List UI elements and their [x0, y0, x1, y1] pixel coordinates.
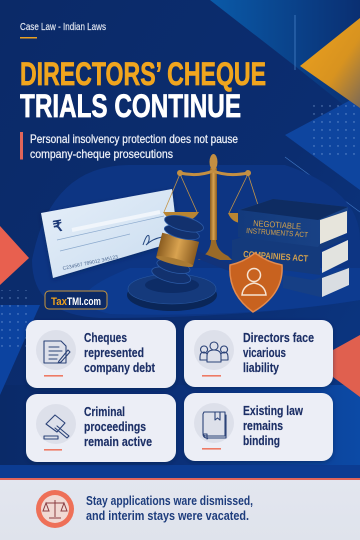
eyebrow label: [20, 21, 106, 38]
icon: people group: [194, 330, 234, 377]
card: criminal proceedings remain active: [26, 394, 176, 462]
card: directors face vicarious liability: Directors face: [243, 330, 314, 345]
card: directors face vicarious liability: liability: [243, 360, 280, 375]
footer text: [86, 493, 253, 523]
card: cheques represented company debt: represented: [84, 345, 144, 360]
logo: TaxTMI.com: Tax: [51, 296, 68, 308]
subtitle: company-cheque prosecutions: [30, 147, 173, 161]
subtitle: [20, 132, 238, 161]
footer band: [0, 478, 360, 540]
icon: stacked law books: NEGOTIABLE: [253, 218, 302, 231]
card: criminal proceedings remain active: proceedings: [84, 419, 146, 434]
icon: scales of justice: [163, 154, 258, 260]
coral accent right: [333, 335, 360, 397]
icon: stacked law books: [232, 199, 350, 297]
card: cheques represented company debt: company debt: [84, 360, 156, 375]
card: cheques represented company debt: [26, 320, 176, 388]
title: [20, 56, 266, 124]
illustration: legal scene: [32, 154, 360, 318]
icon: document with pen: [36, 330, 76, 377]
card: existing law remains binding: [184, 393, 333, 461]
card: directors face vicarious liability: vicarious: [243, 345, 286, 360]
footer text: Stay applications ware dismissed,: [86, 493, 253, 508]
title: DIRECTORS’ CHEQUE: [20, 56, 266, 92]
icon: cheque: [41, 189, 178, 278]
icon: book with bookmark: [194, 403, 234, 450]
card: criminal proceedings remain active: remain active: [84, 434, 152, 449]
icon: gavel: [127, 212, 236, 311]
subtitle: Personal insolvency protection does not pause: [30, 132, 238, 146]
logo: TaxTMI.com: TMI.com: [67, 296, 101, 308]
card: cheques represented company debt: Cheques: [84, 330, 127, 345]
eyebrow label: Case Law - Indian Laws: [20, 21, 106, 33]
orange triangle accent: [300, 18, 360, 108]
icon: stacked law books: INSTRUMENTS ACT: [246, 226, 309, 239]
logo: TaxTMI.com: [45, 291, 107, 309]
footer text: and interim stays were vacated.: [86, 508, 249, 523]
title: TRIALS CONTINUE: [20, 88, 241, 124]
card: directors face vicarious liability: [184, 320, 333, 387]
stage glow: [32, 165, 360, 318]
icon: cheque: C234567 789012 345123: [62, 254, 119, 272]
icon: cheque: ₹: [52, 217, 65, 236]
icon: orange shield with person: [230, 253, 282, 312]
coral accent left: [0, 226, 29, 285]
icon: stacked law books: COMPAINIES ACT: [243, 249, 309, 264]
card: existing law remains binding: remains: [243, 418, 283, 433]
card: criminal proceedings remain active: Criminal: [84, 404, 125, 419]
card: existing law remains binding: binding: [243, 433, 280, 448]
icon: scales in coral circle: [36, 490, 74, 528]
card: existing law remains binding: Existing law: [243, 403, 304, 418]
icon: gavel outline: [36, 404, 76, 451]
